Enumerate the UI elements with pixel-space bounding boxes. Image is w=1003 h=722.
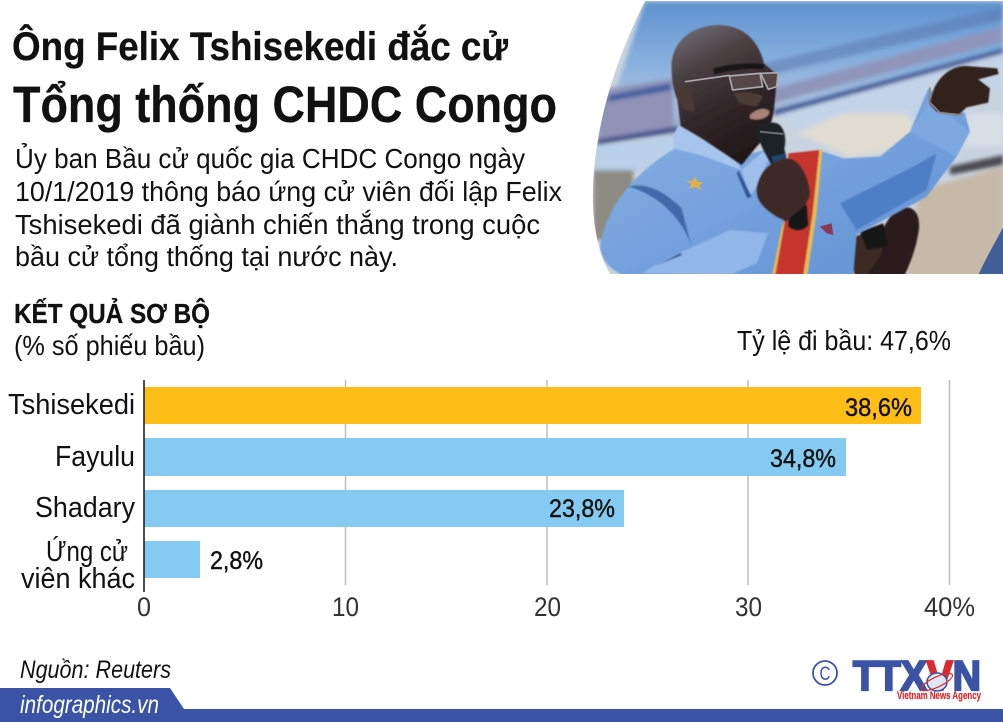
category labels: Shadary xyxy=(35,492,135,524)
hand with microphone xyxy=(756,122,810,230)
intro text block: Tshisekedi đã giành chiến thắng trong cuộc xyxy=(15,209,540,240)
category labels: viên khác xyxy=(21,563,135,595)
turnout note: Tỷ lệ đi bầu: 47,6% xyxy=(737,325,951,356)
category labels: Fayulu xyxy=(55,441,135,473)
shirt and torso xyxy=(600,88,970,275)
intro text block xyxy=(15,142,562,272)
website: infographics.vn xyxy=(20,691,159,719)
intro text block: bầu cử tổng thống tại nước này. xyxy=(15,241,398,272)
bar: Shadary: 23,8% xyxy=(549,495,615,523)
copyright symbol: C xyxy=(820,664,830,685)
glasses xyxy=(685,73,778,90)
category labels xyxy=(8,389,135,595)
pointing hand xyxy=(929,66,999,115)
bystander xyxy=(848,207,919,275)
bar chart xyxy=(8,380,975,622)
bar: Fayulu: 34,8% xyxy=(770,445,836,473)
photo: Felix Tshisekedi speaking xyxy=(590,0,1003,277)
section heading: preliminary results: (% số phiếu bầu) xyxy=(14,330,205,361)
section heading: preliminary results xyxy=(14,297,210,361)
title xyxy=(12,23,557,133)
bar: Fayulu xyxy=(144,438,846,476)
title: Ông Felix Tshisekedi đắc cử xyxy=(12,23,508,69)
title: Tổng thống CHDC Congo xyxy=(13,76,557,133)
axis tick labels: 40% xyxy=(924,592,975,622)
axis line xyxy=(143,380,145,592)
copyright symbol xyxy=(813,661,837,685)
section heading: preliminary results: KẾT QUẢ SƠ BỘ xyxy=(14,297,210,329)
axis tick labels xyxy=(137,592,975,622)
bar: Tshisekedi xyxy=(144,387,921,424)
sash xyxy=(772,150,822,275)
footer band xyxy=(0,688,1003,722)
blurred background xyxy=(593,2,1003,277)
axis tick labels: 0 xyxy=(137,592,151,622)
axis tick labels: 30 xyxy=(735,592,762,622)
axis tick labels: 10 xyxy=(332,592,359,622)
category labels: Ứng cử xyxy=(46,535,128,568)
intro text block: Ủy ban Bầu cử quốc gia CHDC Congo ngày xyxy=(15,142,525,174)
bar: Shadary xyxy=(144,490,624,527)
star on shirt xyxy=(686,177,703,190)
bar: Tshisekedi: 38,6% xyxy=(845,394,912,422)
bar: other candidates: 2,8% xyxy=(210,547,263,575)
axis tick labels: 20 xyxy=(534,592,561,622)
bar: other candidates xyxy=(144,541,263,578)
intro text block: 10/1/2019 thông báo ứng cử viên đối lập Felix xyxy=(15,176,562,207)
neck and head xyxy=(672,25,777,165)
category labels: Tshisekedi xyxy=(8,389,135,421)
source: Nguồn: Reuters xyxy=(20,656,171,684)
logo: TTXVN: TTXVN xyxy=(853,652,981,699)
